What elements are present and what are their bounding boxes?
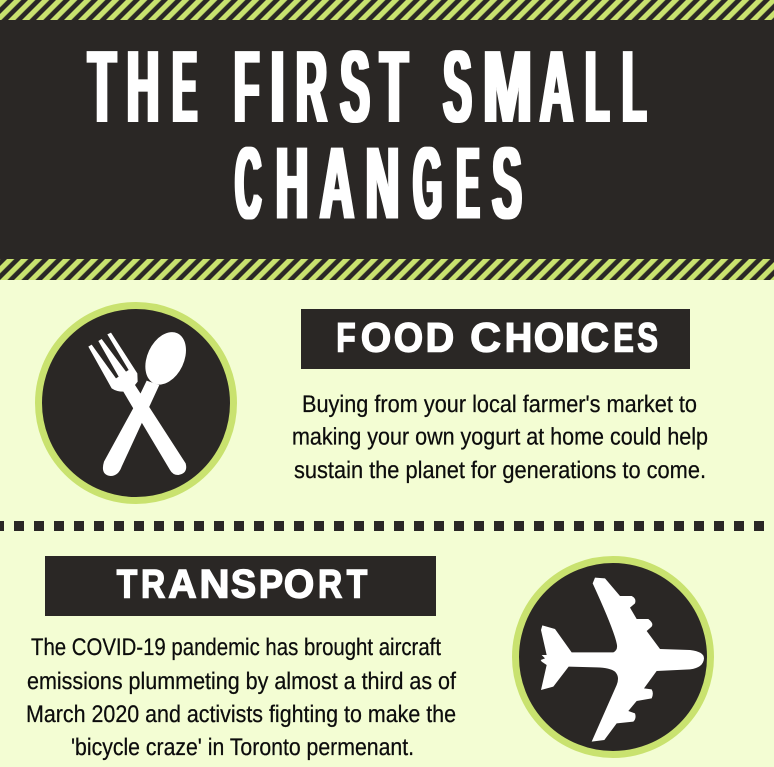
title: E	[457, 126, 479, 240]
heading: transport: T	[117, 563, 137, 607]
heading: transport: N	[200, 563, 230, 607]
heading: transport: O	[284, 563, 314, 607]
heading: food choices: O	[394, 315, 423, 361]
title: S	[443, 29, 472, 144]
title: S	[492, 126, 522, 240]
heading: transport: R	[141, 563, 165, 607]
heading: food choices: O	[534, 315, 564, 361]
heading: transport: A	[168, 563, 197, 607]
heading: food choices: E	[613, 315, 634, 361]
title: S	[340, 29, 370, 144]
dotted divider	[0, 521, 764, 531]
heading: transport	[45, 556, 436, 616]
title: H	[127, 29, 159, 144]
heading: food choices: C	[580, 315, 609, 361]
heading: transport: R	[318, 563, 342, 607]
heading: food choices: C	[470, 315, 501, 361]
title: N	[366, 126, 399, 240]
text block: transport: emissions plummeting by almost a third as of	[27, 668, 456, 695]
header banner	[0, 0, 774, 280]
text block: transport: March 2020 and activists fighting to make the	[26, 701, 456, 728]
text block: food choices: making your own yogurt at home could help	[292, 424, 708, 450]
icon: airplane	[516, 560, 710, 754]
title: H	[276, 126, 308, 240]
title: A	[320, 126, 354, 240]
title: R	[296, 29, 327, 144]
text block: transport	[26, 634, 456, 761]
heading: transport: T	[347, 563, 367, 607]
title: T	[380, 29, 408, 144]
title: M	[483, 29, 532, 144]
title: G	[413, 126, 442, 240]
text block: transport: 'bicycle craze' in Toronto permenant.	[71, 734, 414, 761]
heading: food choices: H	[505, 315, 532, 361]
header banner: L	[622, 29, 646, 144]
heading: food choices: D	[426, 315, 454, 361]
heading: food choices: O	[361, 315, 391, 361]
title: L	[585, 29, 609, 144]
title: E	[172, 29, 197, 144]
icon: fork and spoon	[38, 306, 234, 500]
heading: food choices: F	[336, 315, 356, 361]
text block: food choices	[292, 391, 708, 484]
title: A	[540, 29, 573, 144]
heading: food choices	[301, 309, 690, 369]
heading: transport: P	[259, 563, 283, 607]
heading: food choices: S	[637, 315, 658, 361]
text block: transport: The COVID-19 pandemic has brought aircraft	[31, 634, 441, 661]
heading: transport: S	[231, 563, 256, 607]
text block: food choices: Buying from your local farmer's market to	[302, 391, 697, 418]
title	[88, 29, 646, 240]
text block: food choices: sustain the planet for generations to come.	[294, 457, 706, 484]
title: T	[88, 29, 116, 144]
title: I	[270, 29, 285, 144]
heading: food choices: I	[564, 315, 581, 361]
title: F	[234, 29, 259, 144]
title: C	[235, 126, 261, 240]
